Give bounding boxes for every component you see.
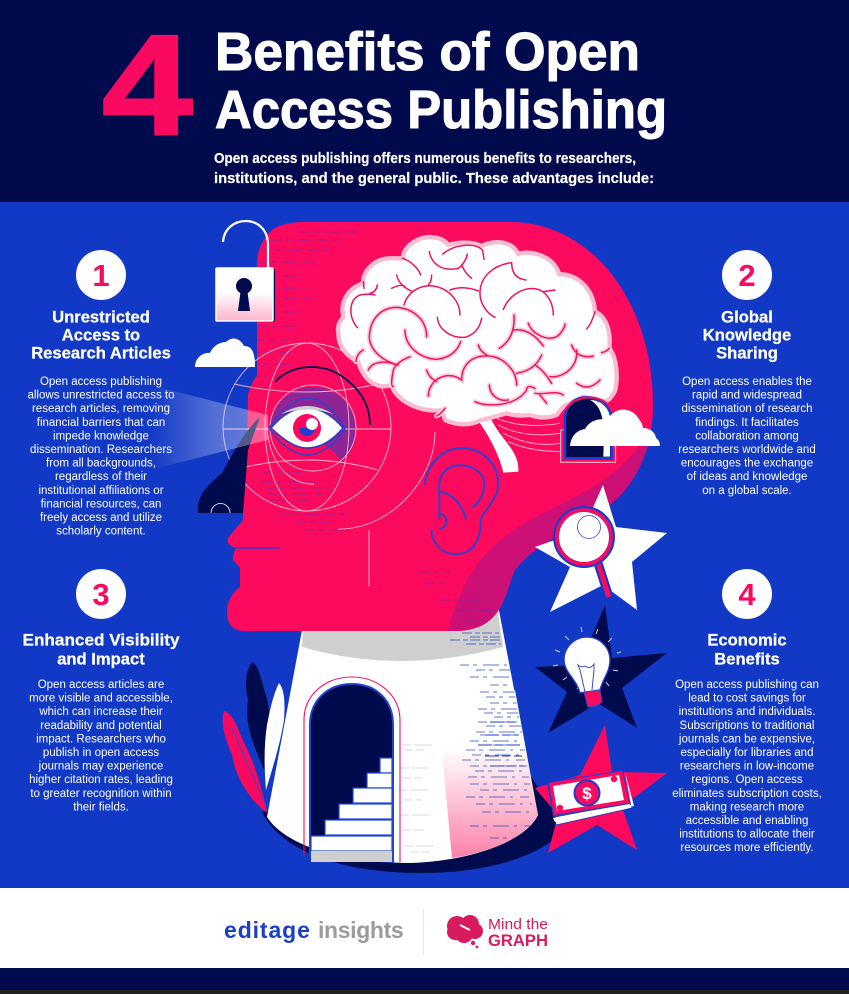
number badge 3 [76, 569, 126, 619]
ear [425, 448, 498, 554]
icon: open padlock [216, 221, 275, 322]
text 4: making research more [690, 801, 804, 813]
number badge 4: 4 [738, 577, 756, 612]
text 1: Open access publishing [40, 376, 162, 388]
icon: small cloud [195, 339, 255, 367]
text 2 [678, 376, 816, 497]
text 1: freely access and utilize [40, 512, 162, 524]
text 1: impede knowledge [53, 430, 149, 442]
title [215, 22, 667, 140]
mouth line [235, 547, 280, 549]
head shading [248, 232, 670, 640]
text 4: accessible and enabling [686, 815, 808, 827]
globe lines [223, 343, 435, 586]
stairs [311, 758, 392, 851]
neck grey band [302, 605, 503, 661]
text 4: resources more efficiently. [680, 842, 814, 854]
arch window with cloud [561, 397, 616, 462]
logo: Mind the Graph: GRAPH [488, 931, 548, 950]
icon: star with magnifier [535, 485, 667, 612]
subtitle: institutions, and the general public. These advantages include: [214, 170, 654, 187]
neck pink shading [437, 690, 538, 858]
text 4: regions. Open access [691, 774, 803, 786]
text 2: encourages the exchange [681, 458, 813, 470]
heading 4 [707, 630, 787, 668]
title: Access Publishing [215, 80, 667, 140]
logo: editage insights: editage [224, 917, 311, 943]
illustration: head with brain [150, 222, 670, 873]
neck [267, 600, 538, 863]
text 4: journals can be expensive, [678, 733, 815, 745]
head shape [227, 222, 653, 631]
logo divider [423, 909, 424, 955]
text 1: allows unrestricted access to [27, 390, 175, 402]
icon: brain logo [447, 915, 483, 948]
text 4 [672, 679, 822, 854]
panel: benefit 1 [27, 250, 175, 538]
header band [0, 0, 849, 202]
text 4: institutions to allocate their [679, 829, 815, 841]
heading 1 [31, 308, 171, 362]
light beam [150, 385, 268, 470]
eye [269, 398, 345, 455]
text 2: researchers worldwide and [678, 444, 816, 456]
title: Benefits of Open [215, 22, 640, 82]
icon: star with money: $ [582, 784, 592, 803]
heading 3: Enhanced Visibility [22, 630, 180, 650]
bottom dark strip [0, 990, 849, 994]
main blue panel [0, 202, 849, 888]
neck hatching [398, 665, 534, 852]
eyebrow [275, 367, 370, 425]
text 3: higher citation rates, leading [29, 774, 173, 786]
heading 1: Research Articles [31, 344, 171, 362]
icon: large cloud [570, 410, 660, 446]
number badge 1 [76, 250, 126, 300]
text 1: financial barriers that can [37, 417, 165, 429]
leaves [223, 662, 284, 813]
door [304, 677, 400, 862]
text 3: journals may experience [38, 761, 163, 773]
text 2: on a global scale. [702, 485, 792, 497]
text 3: readability and potential [40, 720, 162, 732]
heading 4: Economic [707, 630, 787, 650]
text 2: findings. It facilitates [695, 417, 799, 429]
text 1: regardless of their [55, 471, 147, 483]
text 2: collaboration among [695, 430, 799, 442]
heading 2: Knowledge [703, 326, 791, 344]
text 1 [27, 376, 175, 538]
logo: Mind the Graph: Mind the [488, 916, 548, 933]
neck top hatching [450, 633, 501, 644]
text 4: lead to cost savings for [688, 693, 806, 705]
icon: star with money [535, 725, 667, 853]
text 1: institutional affiliations or [38, 485, 164, 497]
heading 2 [703, 308, 791, 362]
eye socket [270, 387, 356, 462]
number badge 4 [722, 569, 772, 619]
text 3: which can increase their [38, 706, 163, 718]
subtitle: Open access publishing offers numerous benefits to researchers, [214, 150, 636, 167]
text 3: to greater recognition within [30, 788, 172, 800]
number badge 3: 3 [92, 577, 110, 612]
subtitle [214, 150, 654, 187]
text 1: from all backgrounds, [46, 458, 156, 470]
text 1: dissemination. Researchers [30, 444, 172, 456]
text 1: research articles, removing [32, 403, 170, 415]
panel: benefit 4 [672, 569, 822, 854]
heading 1: Unrestricted [52, 308, 150, 326]
text 4: Open access publishing can [675, 679, 819, 691]
logo: editage insights: insights [318, 917, 403, 943]
text 2: of ideas and knowledge [687, 471, 807, 483]
text 3: Open access articles are [38, 679, 164, 691]
big number 4: 4 [102, 5, 193, 165]
panel: benefit 3 [22, 569, 180, 813]
text 4: researchers in low-income [680, 761, 814, 773]
heading 2: Sharing [716, 344, 778, 362]
logo: Mind the Graph [447, 915, 548, 950]
footer white band [0, 888, 849, 968]
text 4: institutions and individuals. [679, 706, 815, 718]
text 4: eliminates subscription costs, [672, 788, 822, 800]
heading 3 [22, 630, 180, 668]
text 2: dissemination of research [681, 403, 813, 415]
logo: editage insights [224, 917, 403, 943]
text 2: Open access enables the [682, 376, 812, 388]
text 4: Subscriptions to traditional [680, 720, 814, 732]
number badge 1: 1 [92, 258, 110, 293]
heading 3: and Impact [57, 650, 145, 668]
brain [338, 237, 617, 424]
panel: benefit 2 [678, 250, 816, 497]
text 3: impact. Researchers who [36, 733, 166, 745]
icon: star with light bulb [535, 605, 667, 733]
text 3 [29, 679, 173, 813]
heading 2: Global [721, 308, 773, 326]
text 1: financial resources, can [41, 498, 161, 510]
heading 4: Benefits [714, 650, 780, 668]
heading 1: Access to [62, 326, 140, 344]
text 3: their fields. [73, 801, 129, 813]
number badge 2 [722, 250, 772, 300]
text 3: publish in open access [43, 747, 159, 759]
cerebellum and brain stem [477, 417, 560, 473]
text 1: scholarly content. [56, 526, 146, 538]
text 4: especially for libraries and [681, 747, 813, 759]
text 2: rapid and widespread [692, 390, 802, 402]
number badge 2: 2 [738, 258, 756, 293]
nose [198, 417, 260, 513]
footer navy band [0, 968, 849, 990]
neck shadow [262, 775, 565, 873]
text 3: more visible and accessible, [29, 693, 173, 705]
